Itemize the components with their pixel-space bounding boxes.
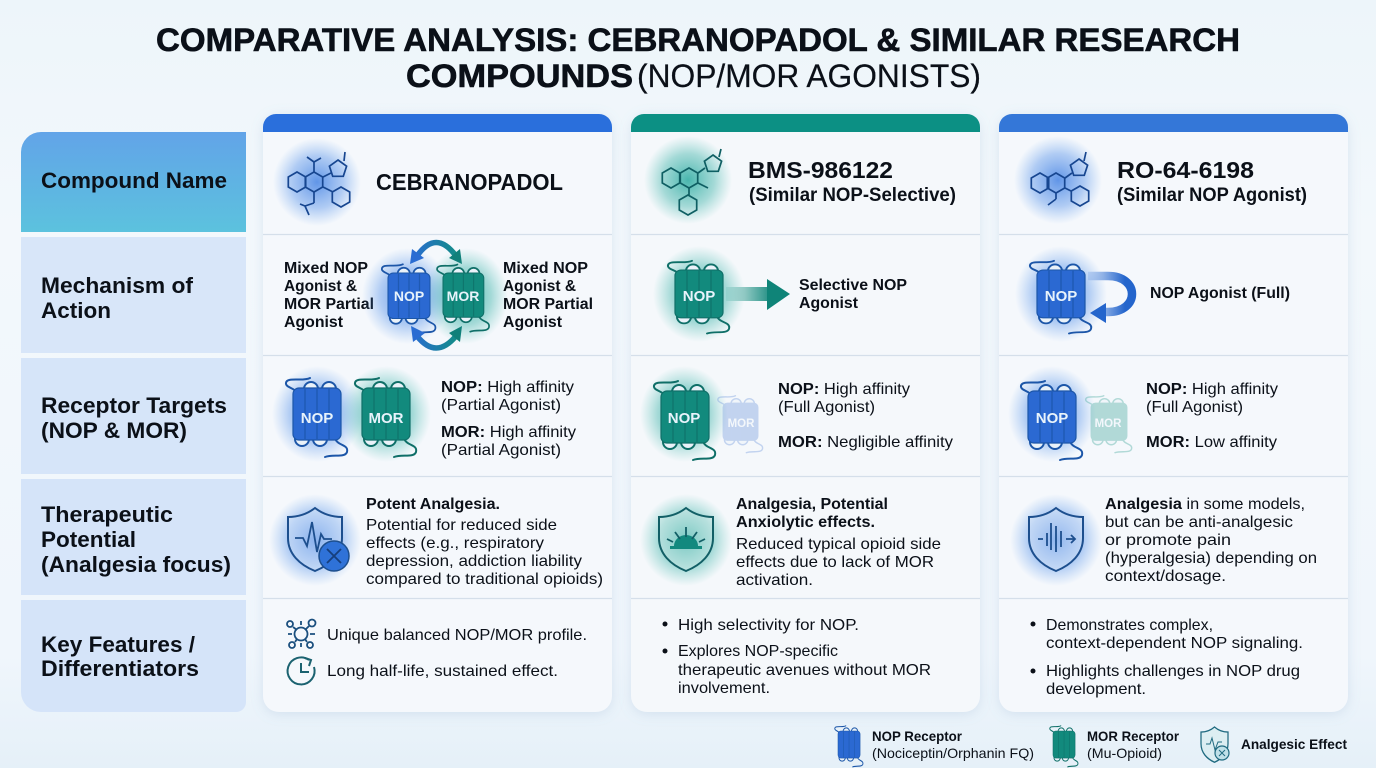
receptor icons: NOP with faint MOR: NOP [668,410,700,427]
receptor affinity text [1146,381,1278,451]
receptor icons: NOP and MOR: MOR [368,410,404,427]
mechanism text: Selective NOP [799,277,907,294]
diagram: NOP and MOR exchange [362,242,508,348]
row label: compound name [21,132,246,232]
mechanism text: Agonist [799,295,859,312]
arrow: selective activation [726,279,790,310]
panel: cebranopadol [263,114,612,712]
diagram: NOP receptor: NOP [1045,288,1077,305]
diagram: selective NOP receptor: NOP [683,288,715,305]
icon: cebranopadol molecule [273,138,361,226]
therapeutic text: effects due to lack of MOR [736,554,934,571]
row label: mechanism of action: Action [41,298,111,323]
icon: clock [288,657,315,684]
therapeutic text [366,496,603,588]
card background [631,114,980,712]
compound name: BMS-986122 [748,157,893,183]
row label: therapeutic potential: Therapeutic [41,502,173,527]
row label: receptor targets: (NOP & MOR) [41,418,187,443]
diagram: NOP receptor [1015,246,1107,342]
therapeutic text: Potential for reduced side [366,517,557,534]
icon: RO molecule [1014,136,1102,224]
key features list [662,617,931,697]
therapeutic text [736,496,941,589]
row label: mechanism of action [21,237,246,353]
row label: key features: Differentiators [41,656,199,681]
compound name [1117,157,1307,206]
therapeutic text: depression, addiction liability [366,553,582,570]
therapeutic text: Potent Analgesia. [366,496,500,513]
card header bar [263,114,612,132]
title: COMPARATIVE ANALYSIS: CEBRANOPADOL & SIMILAR RESEARCH [156,22,1240,58]
icon: network [287,620,316,648]
legend item: NOP receptor: NOP Receptor [872,728,963,744]
therapeutic text: (hyperalgesia) depending on [1105,550,1317,567]
receptor affinity text: NOP: High affinity [441,379,574,396]
mechanism text left: MOR Partial [284,296,374,313]
key features list: involvement. [678,680,770,697]
card background [263,114,612,712]
receptor affinity text: NOP: High affinity [1146,381,1278,398]
row label: key features: Key Features / [41,632,195,657]
receptor affinity text: MOR: High affinity [441,424,576,441]
receptor icons: NOP with faint MOR: MOR [1095,418,1122,430]
mechanism text right: Mixed NOP [503,260,588,277]
key features list: therapeutic avenues without MOR [678,662,931,679]
row label: receptor targets [21,358,246,474]
icon: shield with pulse and cross [269,494,361,586]
receptor affinity text: (Partial Agonist) [441,397,561,414]
receptor icons: NOP and MOR: NOP [301,410,333,427]
title: COMPOUNDS [406,58,633,94]
receptor icons: NOP with faint MOR: MOR [728,418,755,430]
panel: BMS-986122 [631,114,980,712]
key features list [1030,617,1303,698]
receptor icons: NOP and MOR [272,366,431,462]
therapeutic text: context/dosage. [1105,568,1226,585]
legend item: analgesic effect [1201,727,1347,762]
mechanism text right [503,260,593,331]
panel: RO-64-6198 [999,114,1348,712]
row labels column [21,132,246,712]
compound name: RO-64-6198 [1117,157,1254,183]
mechanism text left: Agonist [284,314,344,331]
card header bar [631,114,980,132]
receptor affinity text: (Full Agonist) [778,399,875,416]
therapeutic text: effects (e.g., respiratory [366,535,544,552]
mechanism text left [284,260,374,331]
therapeutic text: Reduced typical opioid side [736,536,941,553]
legend item: NOP receptor: (Nociceptin/Orphanin FQ) [872,745,1034,761]
arrow: self-loop [1088,276,1132,323]
legend item: MOR receptor [1050,726,1180,767]
therapeutic text: activation. [736,572,813,589]
receptor icons: NOP with faint MOR [1008,366,1132,462]
therapeutic text [1105,496,1317,585]
compound name [748,157,956,206]
mechanism text left: Mixed NOP [284,260,368,277]
mechanism text right: MOR Partial [503,296,593,313]
row label: mechanism of action: Mechanism of [41,273,194,298]
row label: therapeutic potential [21,479,246,595]
row label: key features [21,600,246,712]
mechanism text right: Agonist [503,314,563,331]
diagram: NOP and MOR exchange: NOP [394,288,424,304]
card header bar [999,114,1348,132]
mechanism text: NOP Agonist (Full) [1150,285,1290,302]
key features list: Explores NOP-specific [678,643,838,660]
therapeutic text: Analgesia, Potential [736,496,888,513]
compound name: (Similar NOP Agonist) [1117,185,1307,206]
card background [999,114,1348,712]
key features list: development. [1046,681,1146,698]
receptor affinity text: (Full Agonist) [1146,399,1243,416]
receptor affinity text: MOR: Negligible affinity [778,434,953,451]
receptor affinity text [441,379,576,459]
legend [835,726,1347,767]
key features list: context-dependent NOP signaling. [1046,635,1303,652]
therapeutic text: Anxiolytic effects. [736,514,875,531]
therapeutic text: compared to traditional opioids) [366,571,603,588]
receptor icons: NOP with faint MOR: NOP [1036,410,1068,427]
key features list: Demonstrates complex, [1046,617,1213,634]
therapeutic text: but can be anti-analgesic [1105,514,1293,531]
mechanism text [799,277,907,312]
key features list: Highlights challenges in NOP drug [1046,663,1300,680]
mechanism text right: Agonist & [503,278,576,295]
therapeutic text: Analgesia in some models, [1105,496,1305,513]
icon: shield with sunrise [640,494,732,586]
icon: BMS molecule [644,136,732,224]
legend item: NOP receptor [835,726,1034,767]
key features list: High selectivity for NOP. [678,617,859,634]
receptor affinity text [778,381,953,451]
feature text: profile: Unique balanced NOP/MOR profile. [327,627,587,644]
title: (NOP/MOR AGONISTS) [637,58,981,94]
legend item: analgesic effect: Analgesic Effect [1241,736,1347,752]
receptor affinity text: (Partial Agonist) [441,442,561,459]
feature text: half-life: Long half-life, sustained effect. [327,663,558,680]
row label: compound name: Compound Name [41,168,227,193]
legend item: MOR receptor: (Mu-Opioid) [1087,745,1162,761]
row label: receptor targets: Receptor Targets [41,393,227,418]
compound name: CEBRANOPADOL [376,169,563,195]
therapeutic text: or promote pain [1105,532,1231,549]
title [156,22,1240,94]
icon: shield with signal [1010,494,1102,586]
mechanism text left: Agonist & [284,278,357,295]
diagram: NOP and MOR exchange: MOR [447,288,479,304]
receptor affinity text: NOP: High affinity [778,381,910,398]
row label: therapeutic potential: Potential [41,527,136,552]
diagram: selective NOP receptor [653,246,745,342]
receptor icons: NOP with faint MOR [640,366,763,462]
legend item: MOR receptor: MOR Receptor [1087,728,1180,744]
row label: therapeutic potential: (Analgesia focus) [41,552,231,577]
receptor affinity text: MOR: Low affinity [1146,434,1277,451]
compound name: (Similar NOP-Selective) [749,185,956,206]
